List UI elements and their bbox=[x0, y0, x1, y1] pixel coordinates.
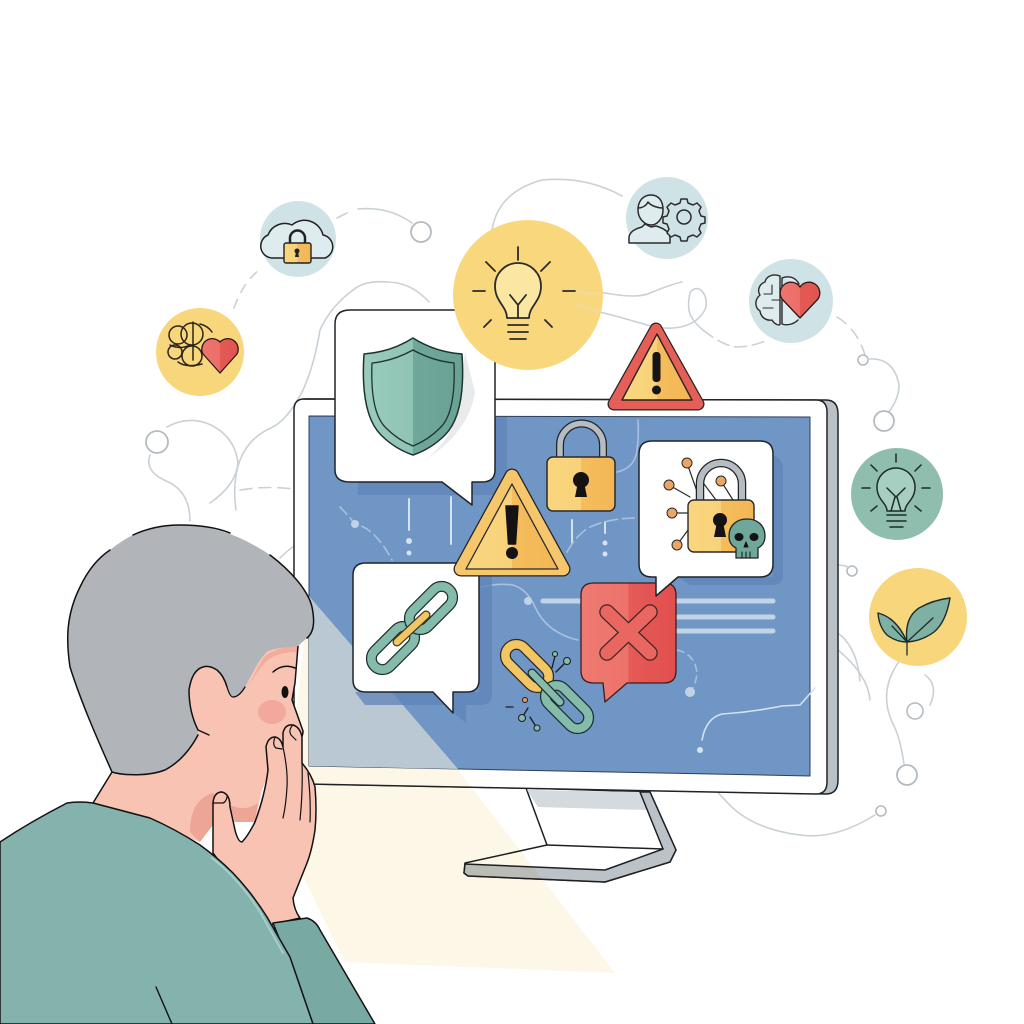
hair bbox=[68, 525, 314, 775]
icon: brain heart blue circle bbox=[749, 259, 833, 343]
ear bbox=[189, 666, 227, 735]
sleeve bbox=[273, 918, 375, 1024]
icon: shield bbox=[363, 338, 463, 455]
padlock on screen bbox=[547, 424, 615, 511]
monitor stand bbox=[464, 788, 676, 882]
monitor frame bbox=[296, 399, 838, 794]
screen light beam bbox=[290, 596, 615, 973]
icon: broken chain on screen bbox=[501, 640, 593, 733]
icon: person and gear circle bbox=[626, 177, 708, 259]
monitor bbox=[294, 399, 838, 882]
warning: yellow triangle bbox=[461, 476, 563, 569]
warning: red triangle bbox=[614, 329, 698, 404]
decorative connectors bbox=[146, 179, 934, 836]
icon: chain bbox=[367, 582, 457, 674]
person bbox=[0, 525, 375, 1024]
icon: big lightbulb circle bbox=[453, 220, 603, 370]
bubble: chain link bbox=[353, 563, 492, 723]
icon: teal lightbulb circle bbox=[851, 448, 943, 540]
bubble: shield bbox=[335, 310, 507, 505]
screen details bbox=[340, 420, 815, 753]
icon: network padlock with skull bbox=[664, 458, 765, 558]
bubble: error X bbox=[581, 583, 676, 702]
body bbox=[0, 802, 313, 1024]
monitor screen bbox=[309, 416, 810, 776]
hand bbox=[213, 725, 316, 925]
bubble: hacked padlock bbox=[639, 441, 783, 596]
icon: brain and heart yellow circle bbox=[156, 308, 244, 396]
head and neck bbox=[93, 646, 303, 842]
icon: leaf yellow circle bbox=[869, 568, 967, 666]
icon: cloud padlock circle bbox=[260, 201, 336, 277]
